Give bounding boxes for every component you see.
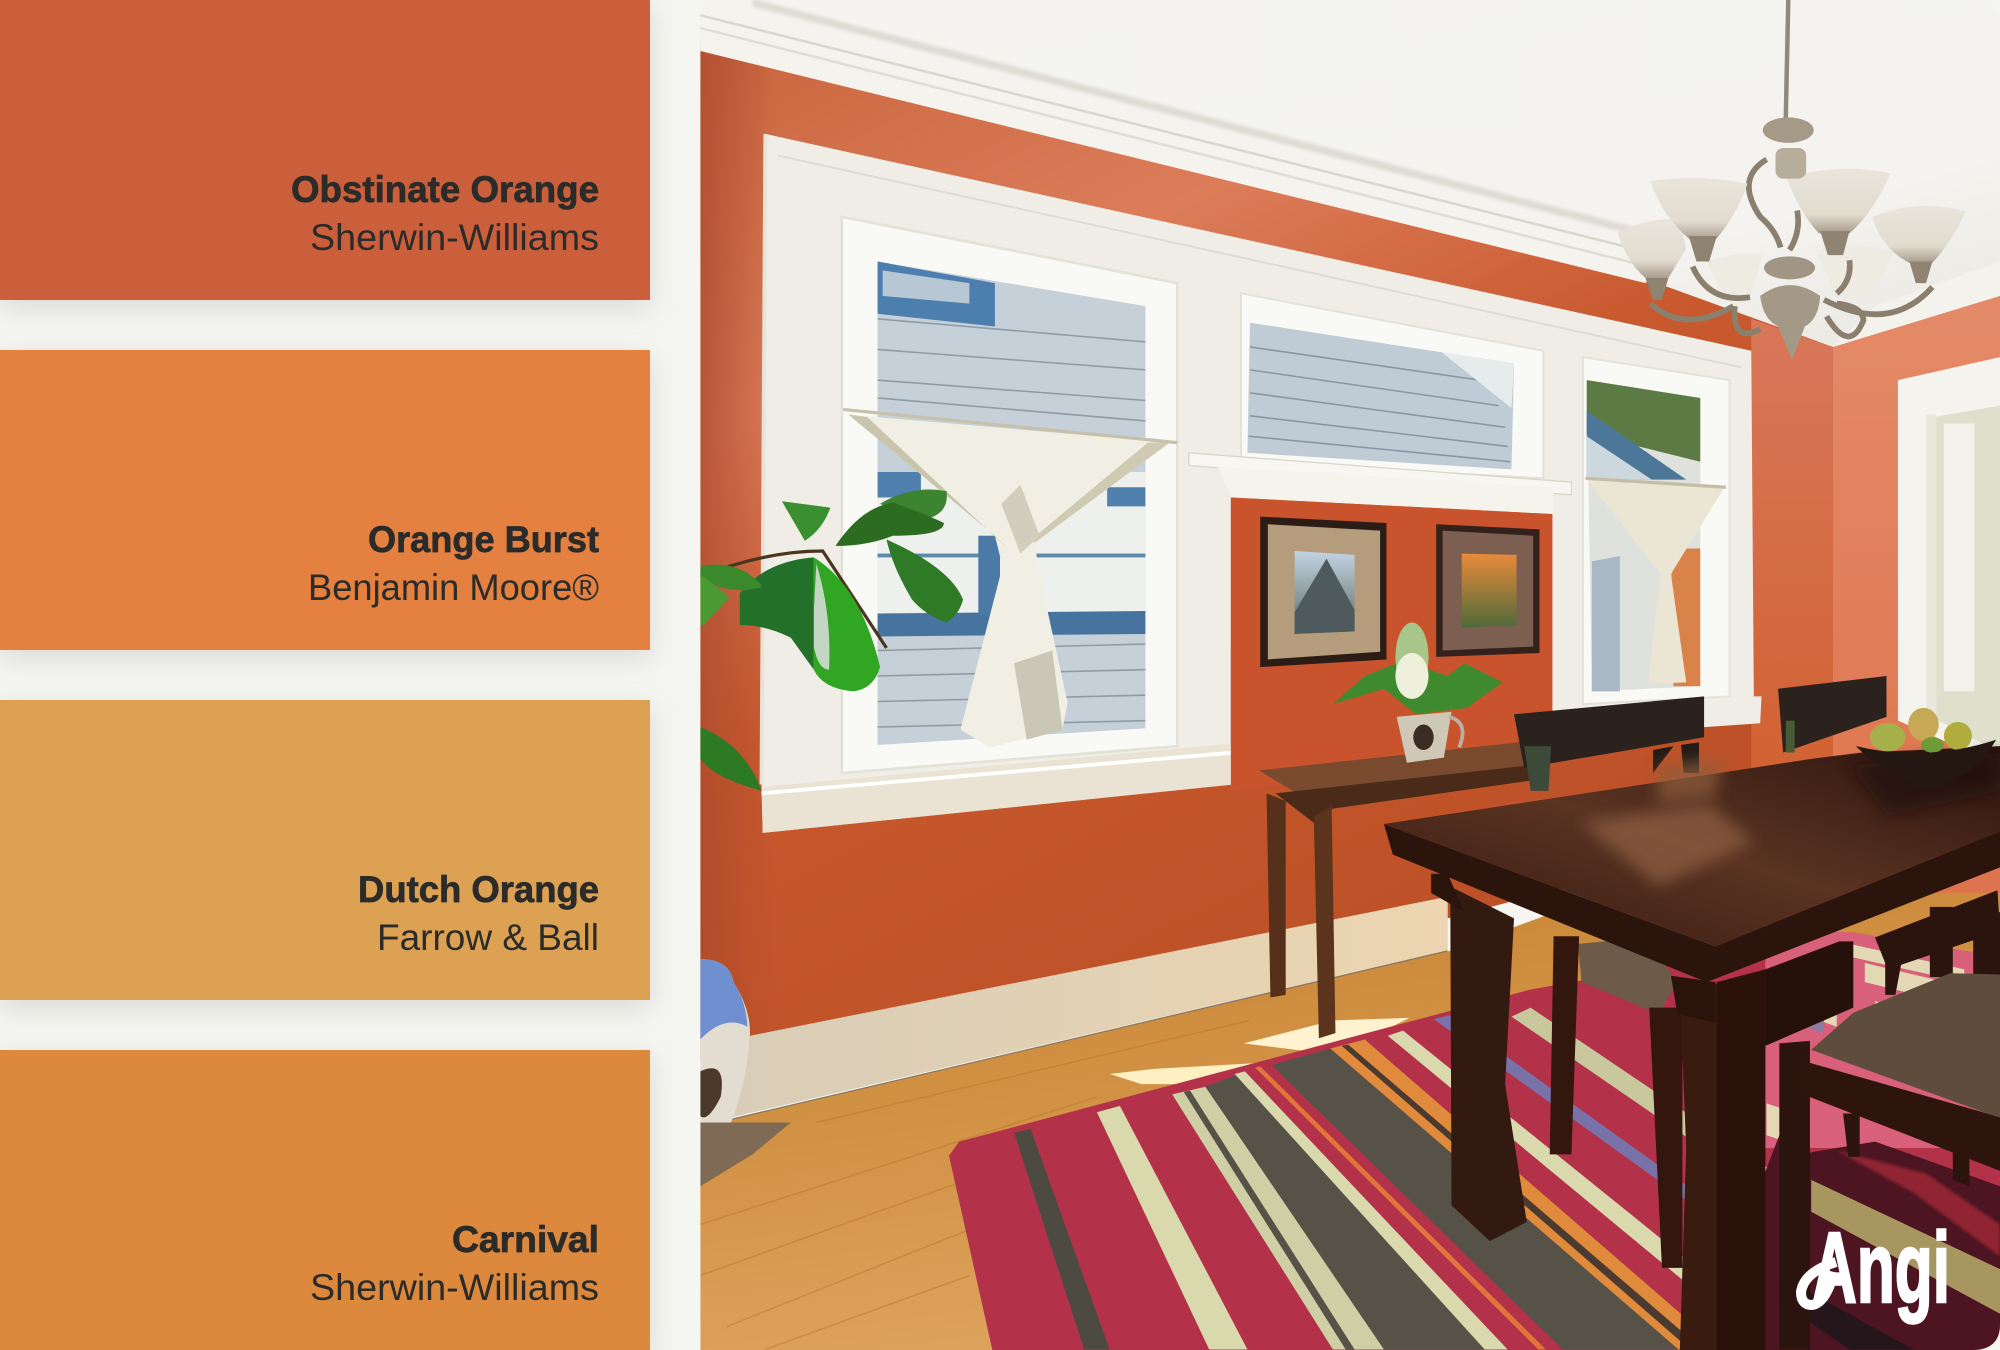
ceramic vase <box>700 959 791 1186</box>
swatch: Orange Burst: Benjamin Moore® <box>308 567 599 608</box>
doorway on right wall <box>1898 357 2000 765</box>
floor wood grain <box>700 1020 1250 1349</box>
main wall <box>700 46 1833 1059</box>
photo: dining room with orange walls <box>700 0 2000 1350</box>
dark chairs behind table <box>1514 676 2000 1268</box>
wall trim and windows <box>761 134 1761 833</box>
swatch: Dutch Orange: Farrow & Ball <box>377 917 599 958</box>
left window glass: siding <box>878 261 1145 745</box>
near chair seat at left of leg <box>1578 937 1677 1014</box>
floor sunlight <box>1110 1018 1409 1084</box>
rug stripes <box>1014 1129 1110 1349</box>
neighbor house window <box>878 261 995 327</box>
swatch: Obstinate Orange <box>0 0 650 300</box>
leg left <box>1450 886 1527 1241</box>
swatch: Orange Burst: Orange Burst <box>368 519 599 560</box>
ledge <box>1189 453 1571 495</box>
vase with flowers <box>1333 622 1503 763</box>
far right chair <box>1875 890 2000 969</box>
right window frame <box>1583 357 1730 704</box>
panel: color swatches <box>0 0 650 1350</box>
fruit bowl <box>1856 708 1996 788</box>
framed picture: mountain <box>1260 517 1386 667</box>
baseboard <box>721 897 1448 1120</box>
framed picture: sunset <box>1436 524 1540 657</box>
crown molding <box>700 0 1671 283</box>
right wall <box>1833 296 2000 893</box>
ceiling <box>1738 231 2000 347</box>
floor <box>700 893 2000 1350</box>
right crown molding <box>1833 290 2000 347</box>
near chair <box>1779 973 2000 1349</box>
leg right <box>1680 969 1765 1350</box>
neighbor house lower wall and blue trim <box>878 472 1145 614</box>
table top <box>1384 746 2000 946</box>
wall section right of windows <box>1751 319 1833 816</box>
pink lit rug area at right <box>1765 930 2000 1148</box>
swatch: Obstinate Orange: Sherwin-Williams <box>310 217 599 258</box>
dark shaded right corner <box>1696 1135 2000 1350</box>
body <box>1763 117 1814 143</box>
plant: fiddle leaf fig <box>700 489 963 791</box>
shade cups <box>1689 236 1717 261</box>
side rail <box>1765 941 1853 1046</box>
console table <box>1259 741 1537 1038</box>
dining table <box>1384 746 2000 1350</box>
transom window <box>1241 293 1543 478</box>
apron <box>1384 824 2000 982</box>
swatch: Carnival: Sherwin-Williams <box>310 1267 599 1308</box>
upper shades <box>1651 178 1747 240</box>
swatch: Dutch Orange <box>0 700 650 1000</box>
swatch: Obstinate Orange: Obstinate Orange <box>291 169 599 210</box>
chandelier <box>1617 0 1966 360</box>
outer trim <box>761 134 1761 833</box>
left window frame <box>842 217 1177 773</box>
swatch: Carnival: Carnival <box>452 1219 599 1260</box>
arms <box>1651 159 1932 336</box>
swatch: Orange Burst <box>0 350 650 650</box>
far left shade <box>1617 219 1686 278</box>
sill <box>761 744 1233 833</box>
right curtain <box>1585 478 1726 684</box>
left curtain <box>843 409 1177 747</box>
swatch: Dutch Orange: Dutch Orange <box>358 869 599 910</box>
swatch: Carnival <box>0 1050 650 1350</box>
chain <box>1786 0 1788 121</box>
lower shades <box>1707 254 1763 297</box>
striped rug <box>949 930 2000 1350</box>
center orange panel <box>1231 497 1552 791</box>
logo: Angi <box>1801 1212 1950 1324</box>
